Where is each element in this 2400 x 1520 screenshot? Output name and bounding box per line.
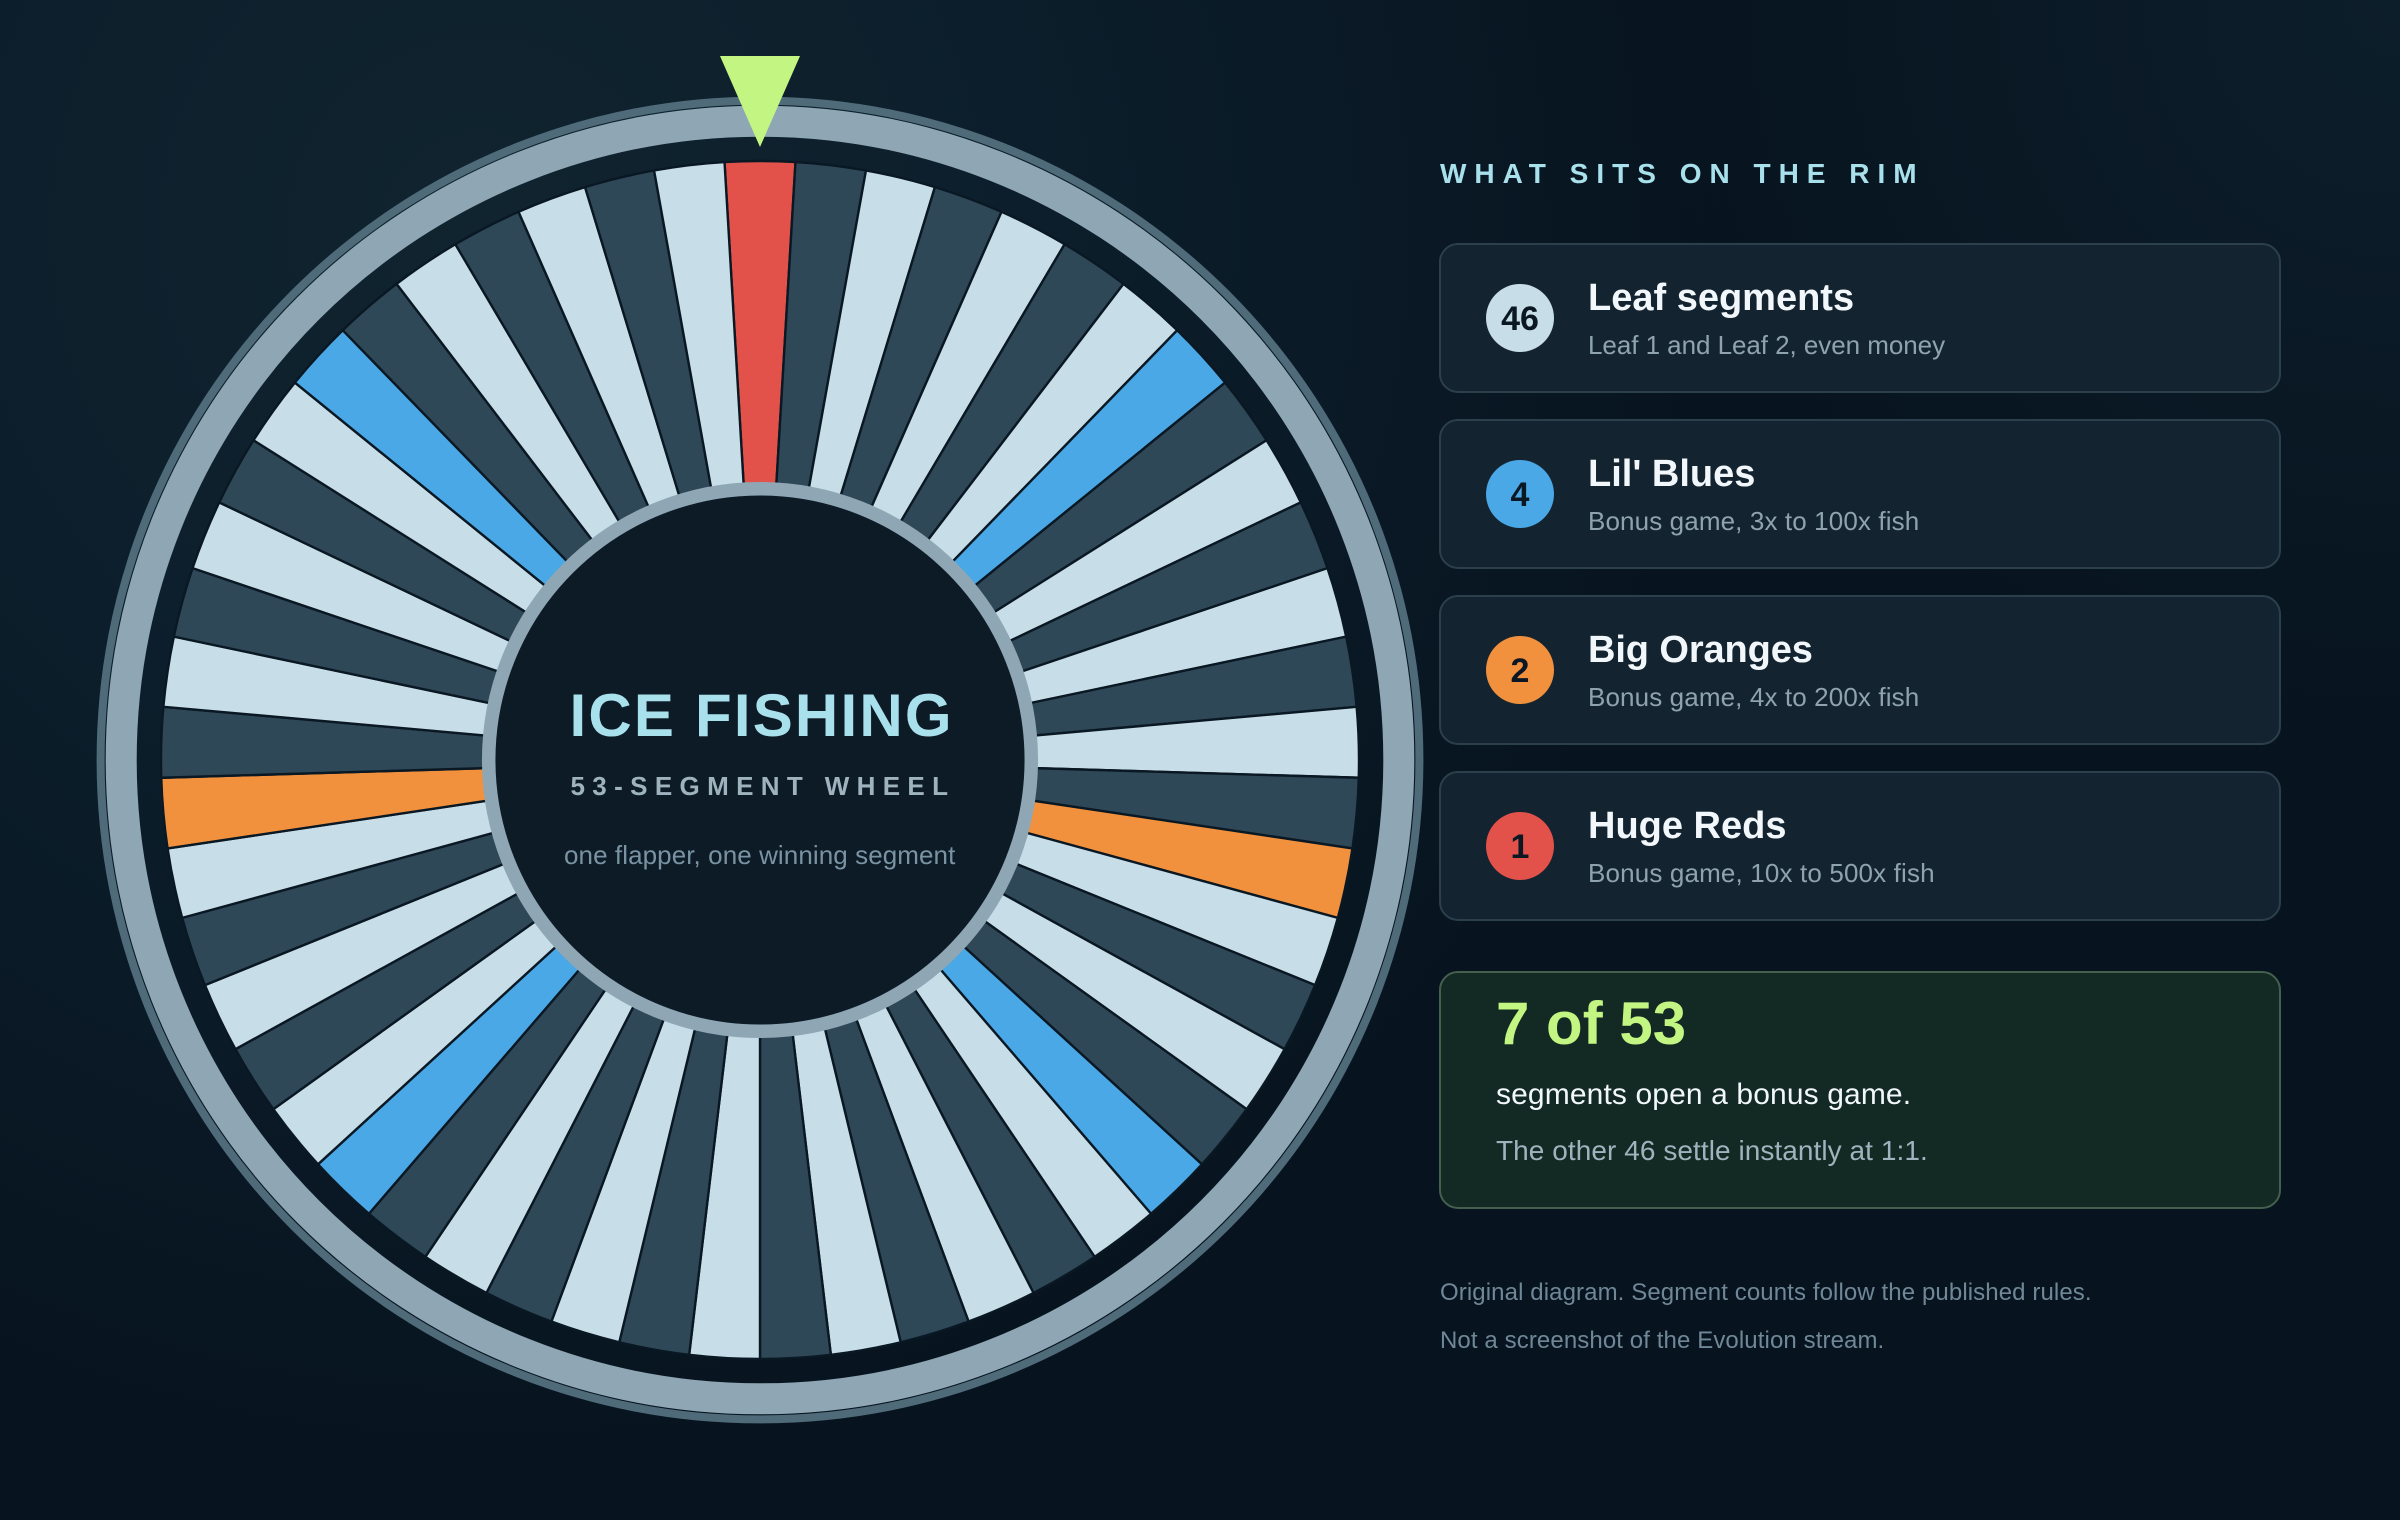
wheel [101,56,1419,1419]
centre hub [489,489,1031,1031]
card title: Big Oranges [1588,629,1813,671]
card: lil' blues [1440,420,2280,568]
segment: Lil' Blue [317,929,598,1215]
callout line: segments open a bonus game. [1496,1078,1911,1111]
callout: 7 of 53 [1440,972,2280,1208]
badge: 2 [1486,636,1554,704]
badge: 46 [1486,284,1554,352]
footnote: Not a screenshot of the Evolution stream. [1440,1327,1884,1354]
card title: Leaf segments [1588,277,1854,319]
wheel segments [160,161,1360,1360]
segment: Lil' Blue [294,330,585,604]
card description: Bonus game, 3x to 100x fish [1588,506,1919,536]
hub tagline: one flapper, one winning segment [564,840,956,870]
badge: 1 [1486,812,1554,880]
card description: Leaf 1 and Leaf 2, even money [1588,330,1945,360]
flapper pointer [720,56,800,147]
segment: Big Orange [1016,781,1353,918]
outer rim [101,101,1419,1419]
heading: what sits on the rim: WHAT SITS ON THE RIM [1440,158,1925,189]
hub title: ICE FISHING [570,682,954,749]
badge: 4: 4 [1511,476,1530,514]
card: leaf segments [1440,244,2280,392]
card title: Lil' Blues [1588,453,1755,495]
card description: Bonus game, 4x to 200x fish [1588,682,1919,712]
badge: 2: 2 [1511,652,1529,690]
footnote: Original diagram. Segment counts follow the published rules. [1440,1279,2092,1306]
segment: Lil' Blue [922,929,1203,1215]
callout number: 7 of 53 [1496,990,1686,1057]
card: big oranges [1440,596,2280,744]
segment: Huge Red [725,161,795,490]
footnote [1440,1279,2092,1354]
card: huge reds [1440,772,2280,920]
card title: Huge Reds [1588,805,1786,847]
segment: Lil' Blue [935,330,1226,604]
hub subtitle: 53-SEGMENT WHEEL [570,771,955,801]
callout note: The other 46 settle instantly at 1:1. [1496,1135,1928,1166]
badge: 1: 1 [1511,828,1529,866]
badge: 46: 46 [1501,300,1539,338]
badge: 4 [1486,460,1554,528]
card description: Bonus game, 10x to 500x fish [1588,858,1935,888]
segment: Big Orange [160,749,495,849]
